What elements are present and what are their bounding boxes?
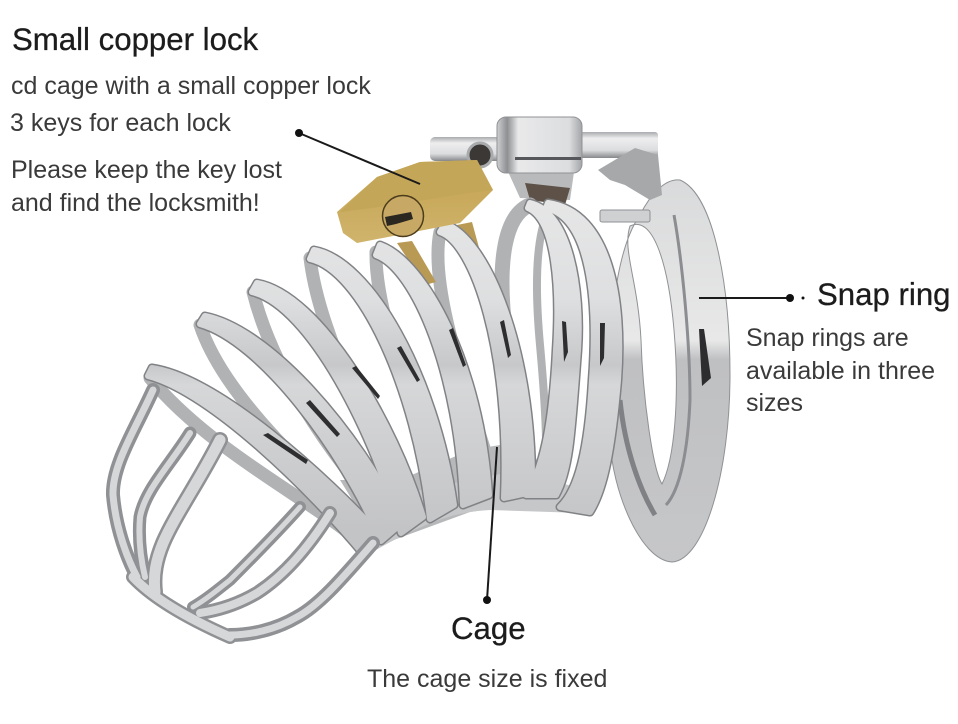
brass reflections xyxy=(397,222,484,285)
text: snap ring description: sizes xyxy=(746,389,803,417)
leader line: snap ring xyxy=(699,294,804,302)
text: key warning xyxy=(11,156,282,217)
text: key warning: and find the locksmith! xyxy=(11,189,260,217)
cage front wires highlight xyxy=(113,390,373,637)
cage front wires base xyxy=(113,390,373,637)
text: snap ring description: Snap rings are xyxy=(746,324,909,352)
top bar and sleeve xyxy=(430,117,662,222)
snap ring xyxy=(609,180,730,562)
heading: cage: Cage xyxy=(451,611,526,646)
heading: small copper lock: Small copper lock xyxy=(12,22,258,57)
cage body underside xyxy=(365,470,600,556)
leader line: cage xyxy=(483,447,497,604)
text: keys: 3 keys for each lock xyxy=(10,109,231,137)
leader line: lock xyxy=(295,129,420,184)
text: snap ring description xyxy=(746,324,935,417)
back arcs of the cage rings xyxy=(150,205,548,530)
text: snap ring description: available in three xyxy=(746,356,935,384)
text: key warning: Please keep the key lost xyxy=(11,156,282,184)
cage body fill between rings xyxy=(340,440,550,545)
padlock xyxy=(337,160,493,243)
heading: snap ring: Snap ring xyxy=(817,277,951,312)
ring reflections xyxy=(263,320,605,464)
text: cage description: The cage size is fixed xyxy=(367,665,607,693)
cage rings xyxy=(148,203,619,555)
text: lock description: cd cage with a small copper lock xyxy=(11,72,371,100)
cage rings outline xyxy=(148,203,619,555)
